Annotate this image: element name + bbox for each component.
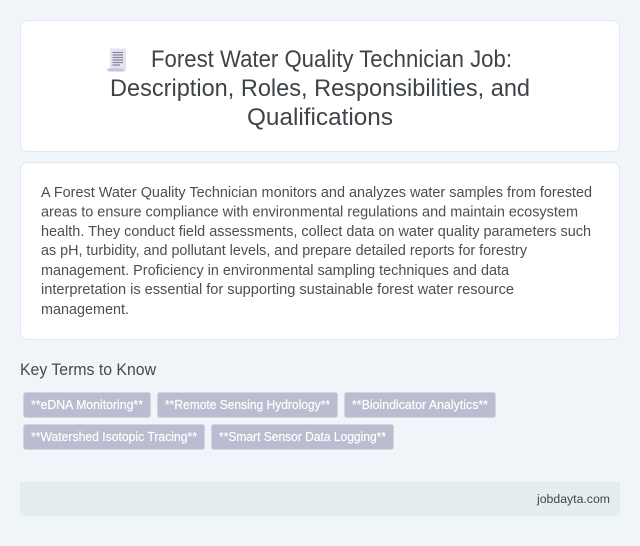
tag: Smart Sensor Data Logging: **Smart Sensor Data Logging** <box>219 430 386 444</box>
text block: description paragraph: A Forest Water Quality Technician monitors and analyzes water samples from forested <box>41 185 592 201</box>
panel: title card <box>20 20 620 152</box>
tag: Smart Sensor Data Logging <box>211 424 394 450</box>
tag: Bioindicator Analytics <box>344 392 496 418</box>
tag: eDNA Monitoring <box>23 392 151 418</box>
heading: key terms: Key Terms to Know <box>20 361 156 379</box>
tag: Bioindicator Analytics: **Bioindicator Analytics** <box>352 398 488 412</box>
tag: Remote Sensing Hydrology <box>157 392 338 418</box>
text block: description paragraph: areas to ensure compliance with environmental regulations and maintain ecosystem <box>41 204 578 220</box>
text block: description paragraph: management. Proficiency in environmental sampling techniques and data <box>41 263 510 279</box>
tag: Remote Sensing Hydrology: **Remote Sensing Hydrology** <box>165 398 330 412</box>
tag: Watershed Isotopic Tracing: **Watershed Isotopic Tracing** <box>31 430 197 444</box>
footer text: site name: jobdayta.com <box>536 492 610 506</box>
tag: Watershed Isotopic Tracing <box>23 424 205 450</box>
text block: description paragraph: management. <box>41 302 129 318</box>
icon: paper scroll <box>107 48 126 72</box>
title: Qualifications <box>247 104 393 131</box>
text block: description paragraph: as pH, turbidity, and pollutant levels, and prepare detailed reports for forestry <box>41 243 528 259</box>
panel: job description <box>20 162 620 340</box>
tag: eDNA Monitoring: **eDNA Monitoring** <box>31 398 143 412</box>
footer bar <box>20 482 620 516</box>
text block: description paragraph: health. They conduct field assessments, collect data on water quality parameters such <box>41 224 591 240</box>
text block: description paragraph: interpretation is essential for supporting sustainable forest water resource <box>41 282 514 298</box>
title: Forest Water Quality Technician Job: <box>151 46 512 73</box>
title: Description, Roles, Responsibilities, and <box>110 75 530 102</box>
